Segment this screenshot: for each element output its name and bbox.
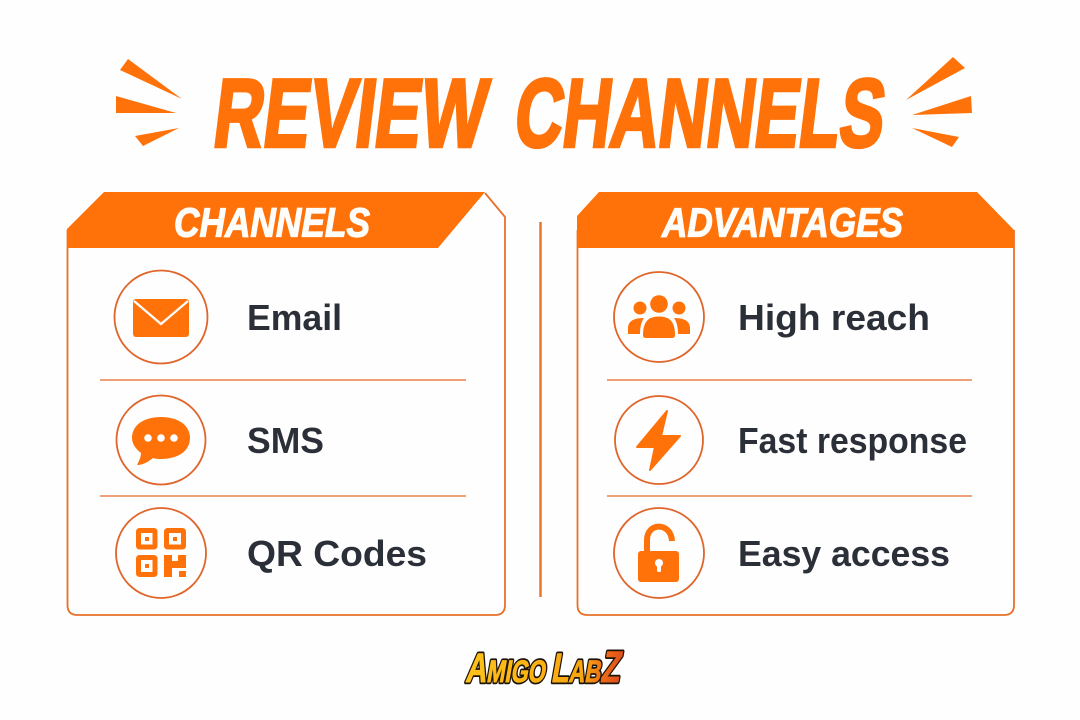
row: easy access xyxy=(614,508,950,598)
panel header: advantages: ADVANTAGES xyxy=(661,200,903,246)
icon: people group xyxy=(614,272,704,362)
icon: qr code xyxy=(116,508,206,598)
label: high reach: High reach xyxy=(738,297,930,338)
panel header: channels: CHANNELS xyxy=(174,200,370,246)
logo: amigo labz: AMIGO LABZ xyxy=(463,643,626,692)
title: CHANNELS xyxy=(509,59,892,167)
panel: channels xyxy=(67,192,505,615)
icon: right burst lines xyxy=(906,57,972,147)
panel header: channels xyxy=(67,192,485,248)
icon: envelope xyxy=(114,270,208,364)
label: easy access: Easy access xyxy=(738,533,950,574)
panel header: advantages xyxy=(577,192,1014,248)
icon: open padlock xyxy=(614,508,704,598)
title: REVIEW xyxy=(208,59,494,167)
logo: amigo labz: AMIGO LABZ xyxy=(463,643,626,692)
icon: speech bubble xyxy=(116,396,206,484)
icon: lightning bolt xyxy=(615,396,703,484)
row: high reach xyxy=(614,272,930,362)
label: fast response: Fast response xyxy=(738,420,967,461)
label: sms: SMS xyxy=(247,420,324,461)
label: email: Email xyxy=(247,297,342,338)
label: qr codes: QR Codes xyxy=(247,533,427,574)
row: fast response xyxy=(615,396,967,484)
row: sms xyxy=(116,396,324,484)
title xyxy=(208,59,892,167)
panel outline xyxy=(578,230,1014,615)
panel outline xyxy=(68,193,505,615)
icon: left burst lines xyxy=(116,59,182,146)
panel: advantages xyxy=(577,192,1014,615)
row: qr codes xyxy=(116,508,427,598)
row: email xyxy=(114,270,342,364)
